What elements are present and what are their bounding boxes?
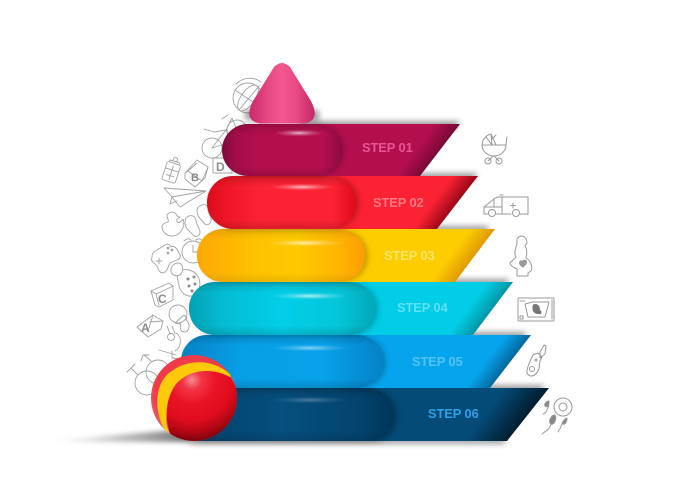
icon: block B: [185, 160, 208, 187]
label: step 02: STEP 02: [373, 195, 424, 210]
icon: globe: [233, 78, 263, 114]
icons: baby doodles behind the pyramid: [127, 78, 263, 395]
label: step 04: STEP 04: [397, 300, 449, 315]
icon: bicycle: [202, 115, 247, 158]
icon: sperm and egg: [542, 398, 572, 434]
icon: block C: [151, 283, 173, 307]
label: step 05: STEP 05: [412, 354, 463, 369]
icon: pregnancy test: [527, 345, 546, 376]
icon: baby feet: [185, 205, 211, 236]
label: step 03: STEP 03: [384, 248, 435, 263]
icon: block B: B: [191, 172, 199, 184]
icon: ultrasound scan: [518, 298, 554, 321]
label: step 06: STEP 06: [428, 406, 479, 421]
icon: block A: [137, 315, 163, 337]
band: step 03: [197, 229, 495, 282]
ring 1: [222, 124, 341, 176]
band: step 01: [222, 124, 460, 176]
ring 3: [197, 229, 365, 282]
ring 6: [172, 388, 393, 441]
band: step 04: [189, 282, 513, 335]
icon: pregnant woman: [510, 236, 532, 276]
icon: block C: C: [158, 292, 167, 306]
ring 2: [207, 176, 356, 229]
band: step 06: [172, 388, 549, 442]
icon: ambulance: [484, 195, 528, 216]
band: step 02: [207, 176, 478, 229]
icon: ladybug rattle: [171, 263, 200, 296]
ring 4: [189, 282, 375, 335]
ball: [150, 354, 239, 445]
shadows: ground shadow: [50, 429, 190, 442]
icon: rubber duck: [162, 212, 184, 236]
icon: block D: D: [216, 160, 225, 174]
icon: microscope: [159, 326, 181, 359]
icon: baby carriage: [482, 134, 507, 164]
cone: top of the pyramid: [249, 63, 315, 124]
icon: block D: [213, 158, 232, 174]
ring 5: [181, 335, 383, 388]
icon: block A: A: [141, 321, 150, 335]
icon: paper plane: [164, 188, 206, 207]
icon: alarm clock: [182, 239, 204, 263]
icon: pacifier: [169, 305, 189, 332]
shadows: band drop shadows: [190, 110, 545, 444]
icon: gender symbols: [127, 355, 170, 395]
ring highlights: [267, 130, 348, 404]
band: step 05: [181, 335, 531, 388]
label: step 01: STEP 01: [362, 140, 413, 155]
icons: step icons on the right: [482, 134, 572, 434]
icon: game pad: [152, 244, 180, 273]
icon: baby bottle: [162, 155, 183, 184]
